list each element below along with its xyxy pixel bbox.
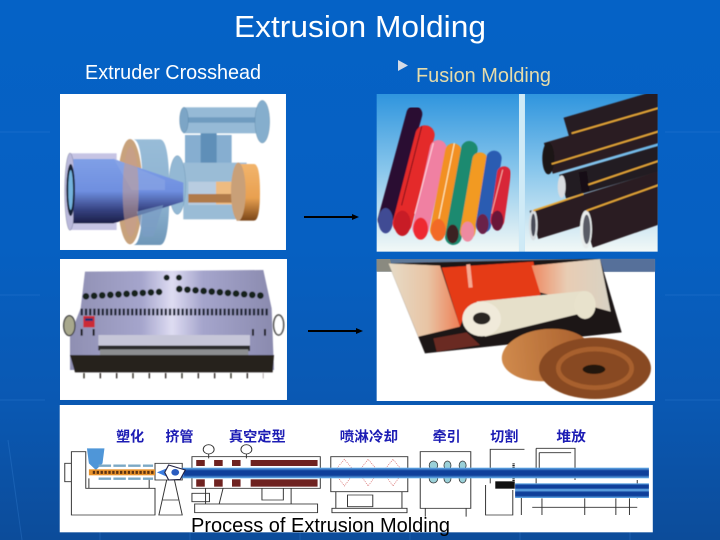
panel: extrusion line process diagram [60,405,653,532]
stage labels: 堆放 [556,428,586,445]
arrow: crosshead to pipes [304,214,359,220]
stage labels: 塑化 [116,428,144,445]
icon: bullet triangle [398,60,408,71]
panel: colored and black pipes photo [377,94,663,252]
heading: extruder crosshead: Extruder Crosshead [85,62,261,84]
label: fusion molding: Fusion Molding [416,65,551,87]
panel: flat die photo [60,259,287,400]
steel flange [133,139,169,245]
black pipes [529,100,663,248]
stage labels: 挤管 [166,428,194,445]
stage labels: 真空定型 [229,428,286,445]
vacuum sizing tank [192,445,320,513]
stage labels: 喷淋冷却 [340,428,398,445]
blue cone [73,159,183,223]
panel: crosshead illustration [60,94,286,250]
arrow: flat die to rolls [308,328,363,334]
cutter [486,449,524,515]
rear body [183,163,247,219]
sleeve [70,153,117,230]
vertical riser and top tube [185,135,232,178]
haul-off [420,452,471,517]
heading: fusion molding [398,60,551,87]
middle collar [169,156,186,214]
colored pipes [378,114,504,243]
caption: Process of Extrusion Molding [191,515,450,537]
extruder machine [65,452,182,515]
stage labels [116,428,586,445]
blue pipe through line [157,465,649,498]
stage labels: 牵引 [433,428,461,445]
spray cooling [331,457,408,513]
title: Extrusion Molding [234,9,486,44]
orange rear cap [237,164,260,221]
stacker [532,448,637,515]
stage labels: 切割 [490,429,518,445]
front orange flange [117,139,143,244]
panel: fiber rolls photo [377,259,655,401]
